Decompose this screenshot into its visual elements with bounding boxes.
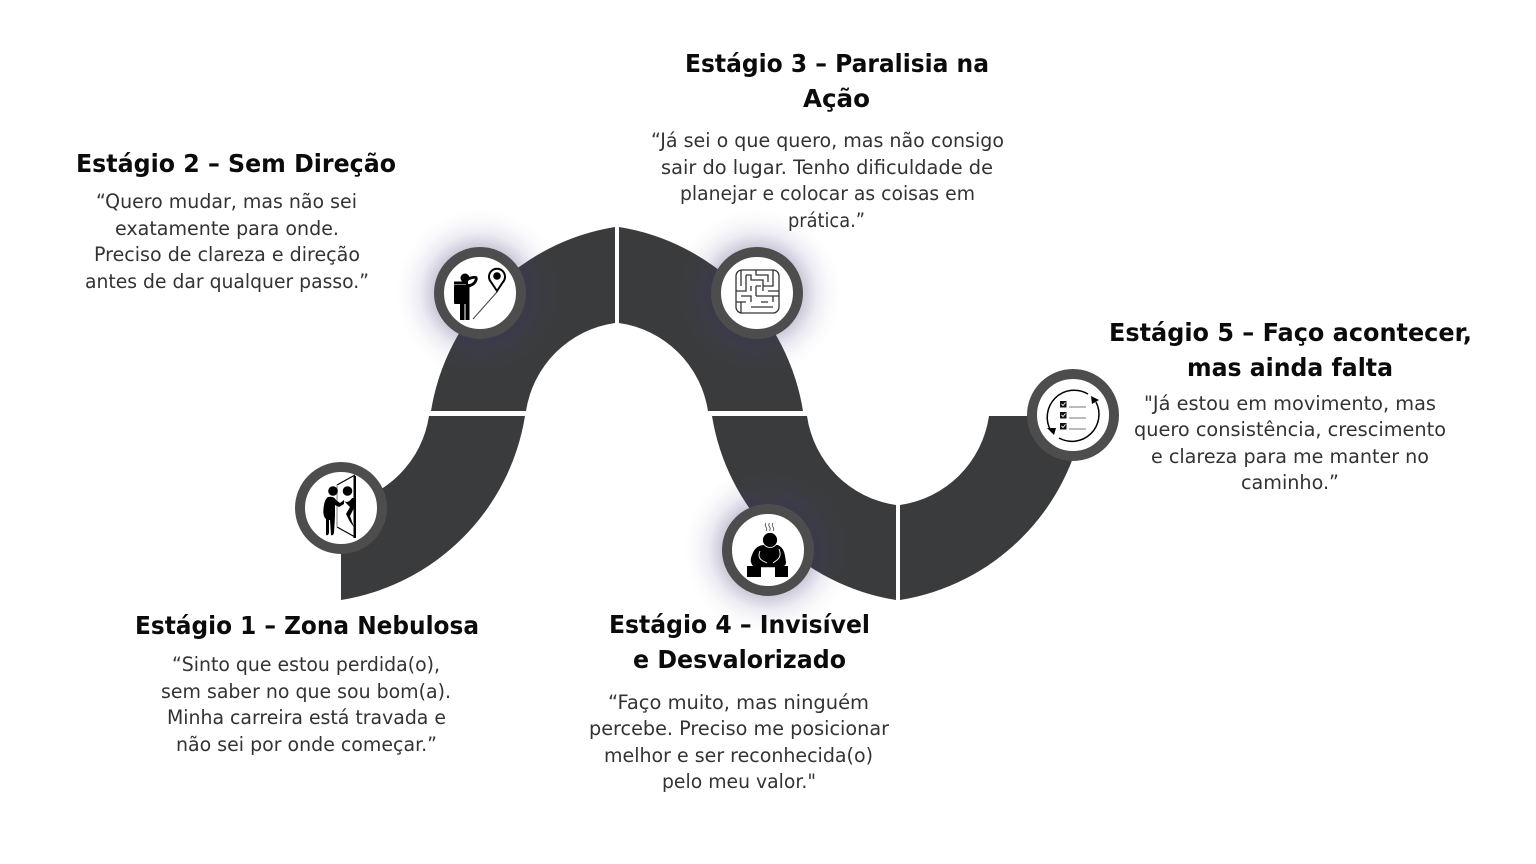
glow: stage 3 <box>673 209 841 377</box>
heading: stage 1: Estágio 1 – Zona Nebulosa <box>135 611 479 640</box>
quote: stage 5: e clareza para me manter no <box>1151 445 1429 468</box>
icon: checklist with cycle arrows <box>1032 374 1114 456</box>
quote: stage 4: “Faço muito, mas ninguém <box>608 691 869 714</box>
quote: stage 2: “Quero mudar, mas não sei <box>96 190 357 213</box>
heading: stage 3: Ação <box>803 84 870 113</box>
road segment 3 <box>619 227 803 411</box>
quote: stage 5: "Já estou em movimento, mas <box>1144 392 1436 415</box>
quote: stage 5 <box>1134 392 1446 494</box>
stage 3 text <box>651 49 1004 232</box>
stage 5 text <box>1109 318 1472 494</box>
icon: hiker and map pin <box>439 252 521 334</box>
heading: stage 4: e Desvalorizado <box>633 645 846 674</box>
quote: stage 4: percebe. Preciso me posicionar <box>589 717 890 740</box>
quote: stage 3: sair do lugar. Tenho dificuldade de <box>661 156 993 179</box>
glow: stage 4 <box>684 466 852 634</box>
quote: stage 1: não sei por onde começar.” <box>176 733 437 756</box>
heading: stage 3 <box>685 49 989 113</box>
stage 1 text <box>135 611 479 756</box>
glow: stage 2 <box>396 209 564 377</box>
quote: stage 3: “Já sei o que quero, mas não consigo <box>651 129 1004 152</box>
quote: stage 4 <box>589 691 890 793</box>
quote: stage 3 <box>651 129 1004 232</box>
winding road <box>341 227 1084 600</box>
quote: stage 2: exatamente para onde. <box>115 217 339 240</box>
heading: stage 3: Estágio 3 – Paralisia na <box>685 49 989 78</box>
quote: stage 3: planejar e colocar as coisas em <box>680 182 975 205</box>
quote: stage 4: melhor e ser reconhecida(o) <box>604 744 873 767</box>
quote: stage 5: quero consistência, crescimento <box>1134 418 1446 441</box>
quote: stage 3: prática.” <box>788 209 865 232</box>
quote: stage 2 <box>85 190 369 293</box>
stage 2 text <box>76 149 396 293</box>
icon: maze <box>716 252 798 334</box>
quote: stage 1: sem saber no que sou bom(a). <box>161 680 451 703</box>
quote: stage 4: pelo meu valor." <box>662 770 816 793</box>
quote: stage 1 <box>161 653 451 756</box>
quote: stage 1: Minha carreira está travada e <box>167 706 446 729</box>
quote: stage 2: Preciso de clareza e direção <box>94 243 360 266</box>
heading: stage 4 <box>609 610 870 674</box>
quote: stage 2: antes de dar qualquer passo.” <box>85 270 369 293</box>
stage 4 text <box>589 610 890 793</box>
heading: stage 2: Estágio 2 – Sem Direção <box>76 149 396 178</box>
road segment 1 <box>341 416 525 600</box>
icon: exhausted seated person <box>727 509 809 591</box>
road segment 5 <box>900 416 1084 600</box>
icon: person at mirror <box>300 467 382 549</box>
heading: stage 5 <box>1109 318 1472 382</box>
road segment 4 <box>712 416 896 600</box>
heading: stage 5: mas ainda falta <box>1187 353 1393 382</box>
heading: stage 5: Estágio 5 – Faço acontecer, <box>1109 318 1472 347</box>
quote: stage 1: “Sinto que estou perdida(o), <box>172 653 440 676</box>
quote: stage 5: caminho.” <box>1241 471 1339 494</box>
heading: stage 4: Estágio 4 – Invisível <box>609 610 870 639</box>
road segment 2 <box>431 227 615 411</box>
